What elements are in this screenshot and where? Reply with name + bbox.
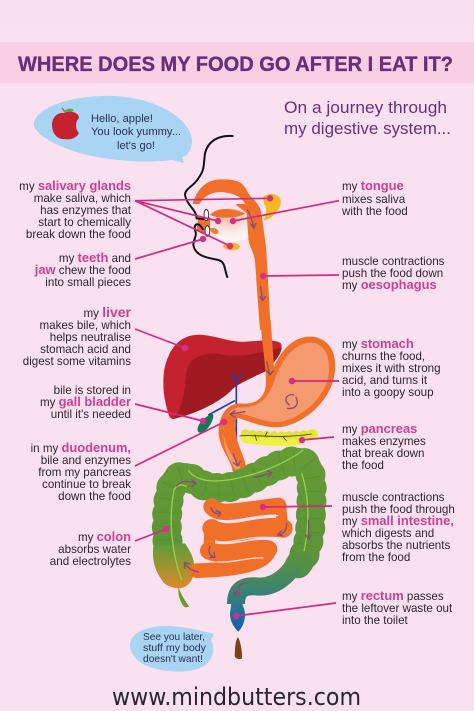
label: pancreas: my pancreas [342, 421, 417, 436]
label: salivary glands: make saliva, which [34, 192, 131, 205]
label: pancreas [342, 421, 426, 472]
label: duodenum: in my duodenum, [31, 440, 131, 455]
speech bubble: goodbye: See you later, [143, 632, 205, 643]
label: rectum: the leftover waste out [342, 602, 453, 615]
label: tongue: mixes saliva [342, 193, 406, 206]
label: teeth and jaw: my teeth and [59, 250, 131, 265]
label: small intestine: muscle contractions [342, 491, 445, 504]
speech bubble: goodbye: stuff my body [143, 643, 207, 654]
label: gall bladder: my gall bladder [40, 394, 131, 409]
face outline [185, 136, 233, 277]
sigmoid and rectum [230, 550, 300, 632]
label: colon: my colon [78, 529, 131, 544]
label: liver: helps neutralise [50, 331, 131, 344]
label: salivary glands: has enzymes that [40, 204, 132, 217]
label: pancreas: the food [342, 459, 384, 472]
label: salivary glands: my salivary glands [19, 178, 131, 193]
title banner [0, 42, 474, 83]
liver [163, 335, 282, 419]
label: small intestine: which digests and [341, 527, 434, 540]
label: small intestine: from the food [342, 551, 410, 564]
label: oesophagus: muscle contractions [342, 255, 445, 268]
label: salivary glands [19, 178, 132, 241]
diagram: digestive system [153, 136, 335, 659]
label: oesophagus [342, 255, 445, 292]
bile ducts and gall bladder [198, 373, 242, 447]
label: stomach: churns the food, [342, 350, 425, 363]
label: small intestine [341, 491, 455, 564]
label: tongue: my tongue [342, 178, 404, 193]
speech bubble: apple: Hello, apple! [91, 113, 153, 125]
label: duodenum: continue to break [42, 478, 131, 491]
speech bubble: goodbye: doesn't want! [143, 654, 203, 665]
label: oesophagus: push the food down [342, 267, 443, 280]
label: salivary glands: break down the food [26, 228, 131, 241]
label: small intestine: absorbs the nutrients [342, 539, 450, 552]
label: liver [23, 304, 132, 368]
subtitle: my digestive system... [284, 120, 451, 138]
label: liver: makes bile, which [40, 319, 131, 332]
speech bubble: apple: You look yummy... [91, 126, 181, 138]
label: stomach [342, 336, 441, 399]
speech bubble: goodbye [130, 626, 214, 672]
label: colon [50, 529, 131, 568]
label: stomach: my stomach [342, 336, 414, 351]
label: liver: digest some vitamins [23, 355, 131, 368]
label: tongue: with the food [341, 205, 408, 218]
waste [235, 637, 242, 659]
stomach and duodenum [219, 320, 335, 472]
pointer lines [135, 195, 339, 619]
icon: apple [52, 108, 79, 139]
label: teeth and jaw: jaw chew the food [34, 262, 131, 277]
label: duodenum [31, 440, 131, 503]
label: stomach: mixes it with strong [342, 362, 441, 375]
pancreas [239, 432, 315, 441]
subtitle [284, 99, 451, 138]
small intestine [184, 506, 287, 572]
speech bubble: apple: let's go! [117, 140, 155, 152]
label: gall bladder: bile is stored in [54, 384, 131, 397]
speech bubble: apple [34, 96, 192, 163]
colon [153, 450, 312, 607]
label: colon: and electrolytes [50, 555, 131, 568]
label: oesophagus: my oesophagus [342, 277, 437, 292]
label: rectum [342, 588, 453, 627]
label: liver: stomach acid and [40, 343, 131, 356]
label: duodenum: from my pancreas [38, 466, 131, 479]
title banner: WHERE DOES MY FOOD GO AFTER I EAT IT? [18, 53, 453, 76]
oesophagus and mouth [185, 136, 281, 330]
label: stomach: into a goopy soup [342, 386, 434, 399]
label: duodenum: down the food [58, 490, 131, 503]
label: gall bladder [40, 384, 131, 421]
label: stomach: acid, and turns it [342, 374, 428, 387]
subtitle: On a journey through [284, 99, 447, 117]
label: colon: absorbs water [58, 543, 131, 556]
label: salivary glands: start to chemically [38, 216, 131, 229]
label: small intestine: my small intestine, [342, 513, 454, 528]
label: rectum: into the toilet [342, 614, 409, 627]
label: pancreas: that break down [342, 447, 424, 460]
label: rectum: my rectum passes [342, 588, 444, 603]
label: teeth and jaw: into small pieces [45, 276, 131, 289]
label: gall bladder: until it's needed [51, 408, 131, 421]
label: duodenum: bile and enzymes [41, 454, 131, 467]
label: teeth and jaw [34, 250, 131, 289]
label: small intestine: push the food through [342, 503, 455, 516]
label: pancreas: makes enzymes [342, 435, 426, 448]
label: liver: my liver [84, 304, 132, 320]
label: tongue [341, 178, 408, 218]
website footer: www.mindbutters.com [112, 683, 361, 711]
